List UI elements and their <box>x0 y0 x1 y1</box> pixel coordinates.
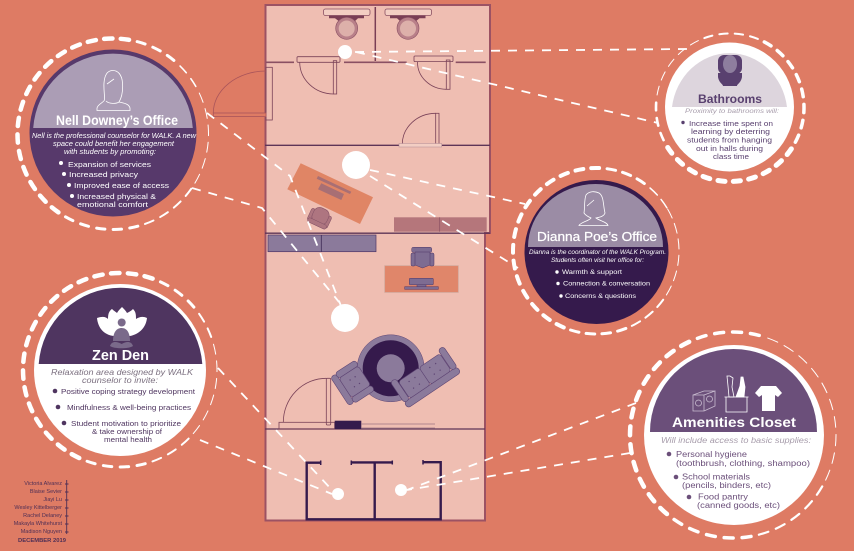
credits: Jiayi Lu <box>43 497 62 503</box>
connector lines: Nell Downey's Office <box>192 113 341 306</box>
bullet list: Improved ease of access <box>74 181 169 190</box>
credits: Wesley Kittelberger <box>14 505 62 511</box>
credits: Rachel Delaney <box>23 513 62 519</box>
bullet list: Expansion of services <box>68 160 151 169</box>
marker: amenities <box>395 484 407 496</box>
bullet list <box>53 387 196 444</box>
credits: Victoria Alvarez <box>24 481 62 487</box>
icon: woman <box>579 192 608 226</box>
lower door and radiator <box>279 378 435 429</box>
marker: Nell office <box>331 304 359 332</box>
dashed ring <box>18 38 208 230</box>
bullet list: Food pantry <box>698 492 748 502</box>
dashed ring <box>630 332 836 538</box>
connector lines: Bathrooms <box>355 45 692 123</box>
outside door <box>213 71 266 117</box>
icons: supplies <box>693 376 782 412</box>
bullet list: mental health <box>104 435 152 444</box>
marker: Dianna office <box>342 151 370 179</box>
heading: Amenities Closet <box>672 414 796 430</box>
floor plan <box>213 5 490 520</box>
cabinets <box>268 217 487 252</box>
credits <box>14 480 68 544</box>
bullet list: Positive coping strategy development <box>61 387 196 396</box>
office desk two <box>385 247 458 292</box>
heading: Nell Downey’s Office <box>56 112 178 128</box>
bullet list: Warmth & support <box>562 269 622 276</box>
bullet list <box>667 450 810 510</box>
bullet list: (canned goods, etc) <box>697 501 780 510</box>
marker: Zen Den <box>332 488 344 500</box>
credits: DECEMBER 2019 <box>18 538 66 544</box>
description: Relaxation area designed by WALK <box>51 368 194 377</box>
panel: Zen Den <box>23 273 217 467</box>
armchair <box>330 360 375 407</box>
bullet list: (pencils, binders, etc) <box>682 481 771 490</box>
heading: Zen Den <box>92 347 149 364</box>
bullet list: Increase time spent on <box>689 121 773 128</box>
connector lines: Amenities Closet <box>407 403 636 490</box>
panel: Amenities Closet <box>630 332 836 538</box>
icon: cans <box>693 391 715 411</box>
credits: Blaise Sevier <box>30 489 62 495</box>
description: Nell is the professional counselor for WALK. A new <box>32 133 197 140</box>
connector lines: Dianna Poe's Office <box>370 170 525 268</box>
heading: Dianna Poe’s Office <box>537 229 657 244</box>
bullet list: Mindfulness & well-being practices <box>67 403 191 412</box>
bullet list: Increased privacy <box>69 170 138 179</box>
credits: Madison Nguyen <box>21 529 62 535</box>
rug and table <box>357 335 424 402</box>
bullet list: Concerns & questions <box>565 293 636 300</box>
bathroom stalls <box>266 7 486 147</box>
heading: Bathrooms <box>698 94 762 106</box>
bullet list: Connection & conversation <box>563 280 651 288</box>
connector lines: Zen Den <box>200 368 332 494</box>
bullet list <box>681 121 773 161</box>
description: Proximity to bathrooms will: <box>685 109 779 115</box>
panel: Bathrooms <box>656 34 804 182</box>
bullet list: School materials <box>682 472 750 482</box>
bullet list <box>59 160 169 209</box>
bullet list: class time <box>713 154 749 161</box>
bullet list: & take ownership of <box>92 427 163 436</box>
bullet list: Personal hygiene <box>676 450 748 459</box>
icon: woman <box>97 70 130 110</box>
bullet list: (toothbrush, clothing, shampoo) <box>676 459 810 468</box>
icon: toiletries cup <box>724 376 748 412</box>
panel: Nell Downey's Office <box>18 38 208 230</box>
office desk one <box>287 163 373 230</box>
bullet list: learning by deterring <box>691 129 770 136</box>
icon: lotus and meditating figure <box>97 307 147 348</box>
icon: toilet <box>718 55 742 86</box>
closets <box>307 460 441 519</box>
description: space could benefit her engagement <box>53 141 175 148</box>
panel: Dianna Poe's Office <box>513 168 679 334</box>
dashed ring <box>513 168 679 334</box>
description: Students often visit her office for: <box>551 258 644 264</box>
marker: bathrooms <box>338 45 352 59</box>
description <box>32 133 197 156</box>
description: with students by promoting: <box>64 149 156 156</box>
dashed ring <box>23 273 217 467</box>
description: counselor to invite: <box>82 376 158 385</box>
description <box>529 250 666 264</box>
credits: Makayla Whitehurst <box>14 521 62 527</box>
dashed ring <box>656 34 804 182</box>
sofa <box>390 346 461 408</box>
icon: t-shirt <box>755 386 782 411</box>
bullet list: emotional comfort <box>77 200 149 209</box>
bullet list: Increased physical & <box>77 192 156 201</box>
bullet list: students from hanging <box>687 138 772 144</box>
bullet list: Student motivation to prioritize <box>71 419 181 428</box>
description: Dianna is the coordinator of the WALK Program. <box>529 250 666 256</box>
bullet list <box>555 269 651 300</box>
bullet list: out in halls during <box>696 146 763 153</box>
description <box>51 368 194 385</box>
description: Will include access to basic supplies: <box>661 436 811 445</box>
